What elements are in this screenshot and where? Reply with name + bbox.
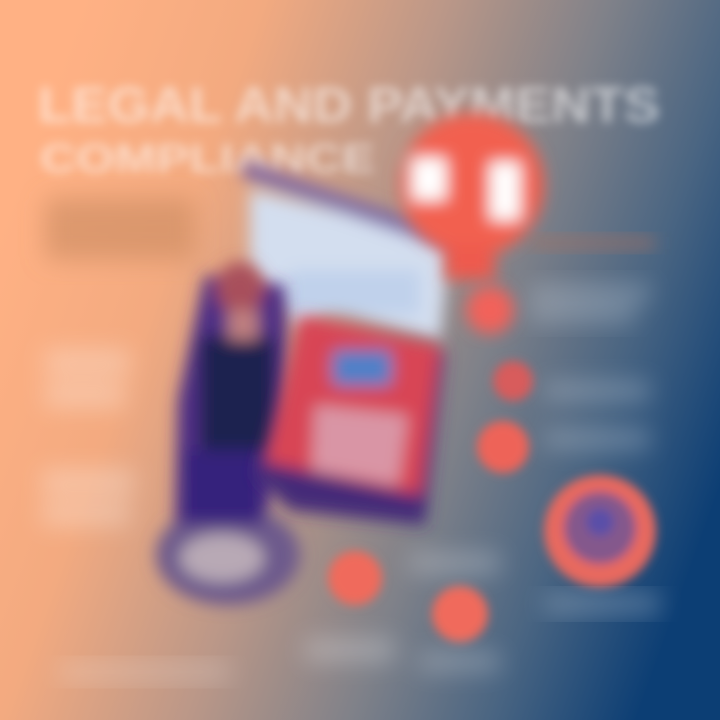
- bottom centre text block: [305, 553, 500, 671]
- red badge icon: [400, 113, 544, 280]
- red icon: middle: [493, 361, 533, 401]
- title: [38, 77, 660, 181]
- left text block: upper: [45, 350, 130, 407]
- red icon: upper connector: [466, 286, 514, 334]
- seal caption: [545, 594, 660, 614]
- document illustration: [242, 160, 470, 340]
- title: LEGAL AND PAYMENTS: [38, 77, 660, 133]
- left text block: lower: [42, 470, 134, 525]
- right text block: heading: [530, 236, 655, 250]
- red icon: lower: [477, 421, 529, 473]
- right text block: second item: [545, 382, 650, 448]
- red icon: bottom left: [328, 551, 382, 605]
- person illustration: [156, 262, 300, 605]
- bottom left caption: [60, 663, 230, 681]
- title: COMPLIANCE: [40, 137, 375, 181]
- red icon: bottom right: [432, 586, 488, 642]
- red calculator card: [255, 315, 445, 525]
- intro text block: [45, 198, 195, 260]
- right text block: first item: [530, 285, 650, 322]
- round seal icon: [544, 475, 656, 587]
